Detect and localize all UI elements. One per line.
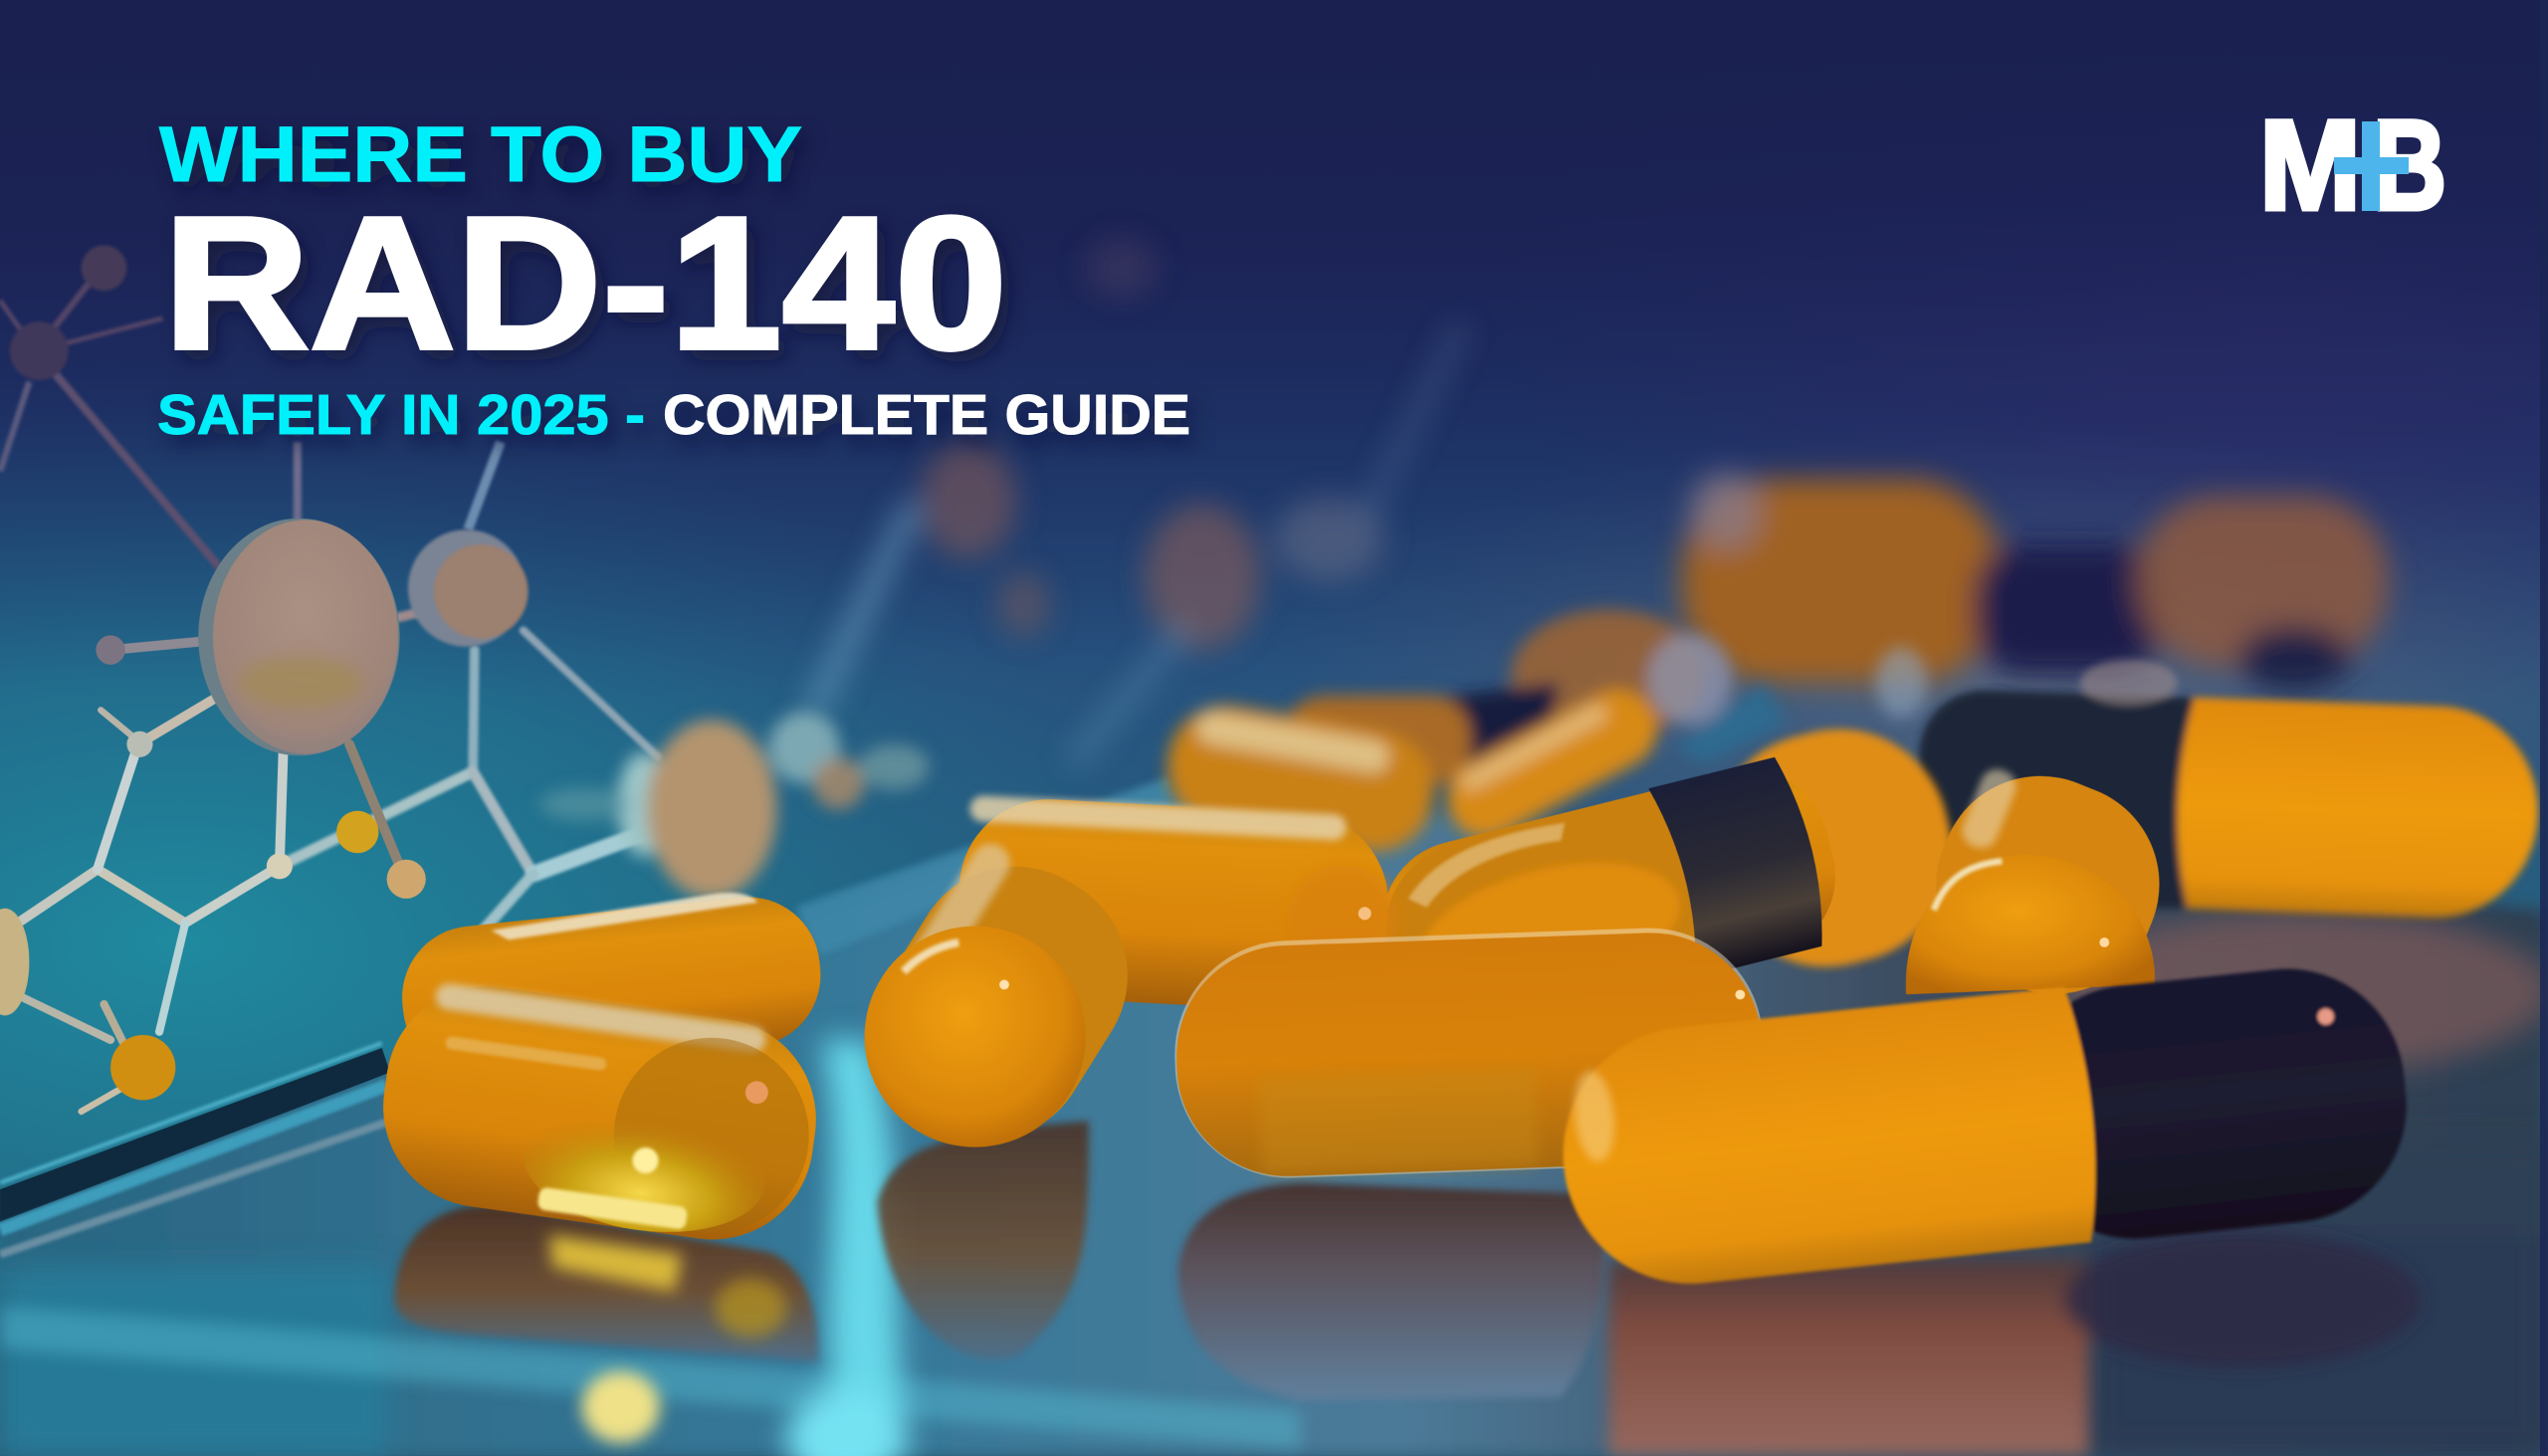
second atom — [408, 529, 529, 647]
capsule: end-on center-left — [834, 827, 1167, 1179]
capsule: center long orange — [1170, 925, 1767, 1181]
heading: where to buy: WHERE TO BUY — [159, 109, 802, 198]
logo: MB with plus: M — [2259, 95, 2361, 237]
molecule model — [0, 246, 930, 1112]
small atoms — [96, 635, 125, 665]
heading: RAD-140: RAD-140 — [163, 178, 1007, 389]
logo: MB with plus: B — [2373, 95, 2446, 237]
logo: MB with plus — [2259, 95, 2446, 237]
table surface — [0, 786, 2548, 1456]
very blurred back capsule — [1682, 473, 2389, 691]
capsule: upper center orange — [954, 795, 1404, 1016]
table edge lines — [0, 776, 1300, 1449]
capsule: middle with clear end and dark band — [1365, 749, 1853, 1049]
far blurred molecule — [812, 239, 1462, 763]
top navy fade — [0, 0, 2548, 699]
capsule: back left — [394, 884, 828, 1083]
right edge strip — [2540, 0, 2548, 1456]
blurred back cluster — [1159, 609, 1927, 861]
capsule: front left translucent — [370, 973, 829, 1253]
upper-left dim molecule — [0, 246, 501, 577]
front bonds — [13, 640, 403, 1112]
blurred far atom cluster — [539, 712, 930, 899]
big atom disc — [198, 519, 400, 755]
capsule: front large orange and black — [1551, 952, 2418, 1298]
subheading: safely in 2025: SAFELY IN 2025 - — [157, 383, 645, 447]
capsule: right back black and orange — [1914, 660, 2542, 921]
capsule reflections — [395, 1040, 2422, 1456]
subheading: complete guide: COMPLETE GUIDE — [663, 383, 1190, 447]
capsule: back orange behind dark band — [1689, 706, 1976, 990]
title block — [157, 109, 1190, 447]
capsule: small end-on right — [1906, 745, 2190, 1024]
mid bonds — [280, 601, 658, 933]
